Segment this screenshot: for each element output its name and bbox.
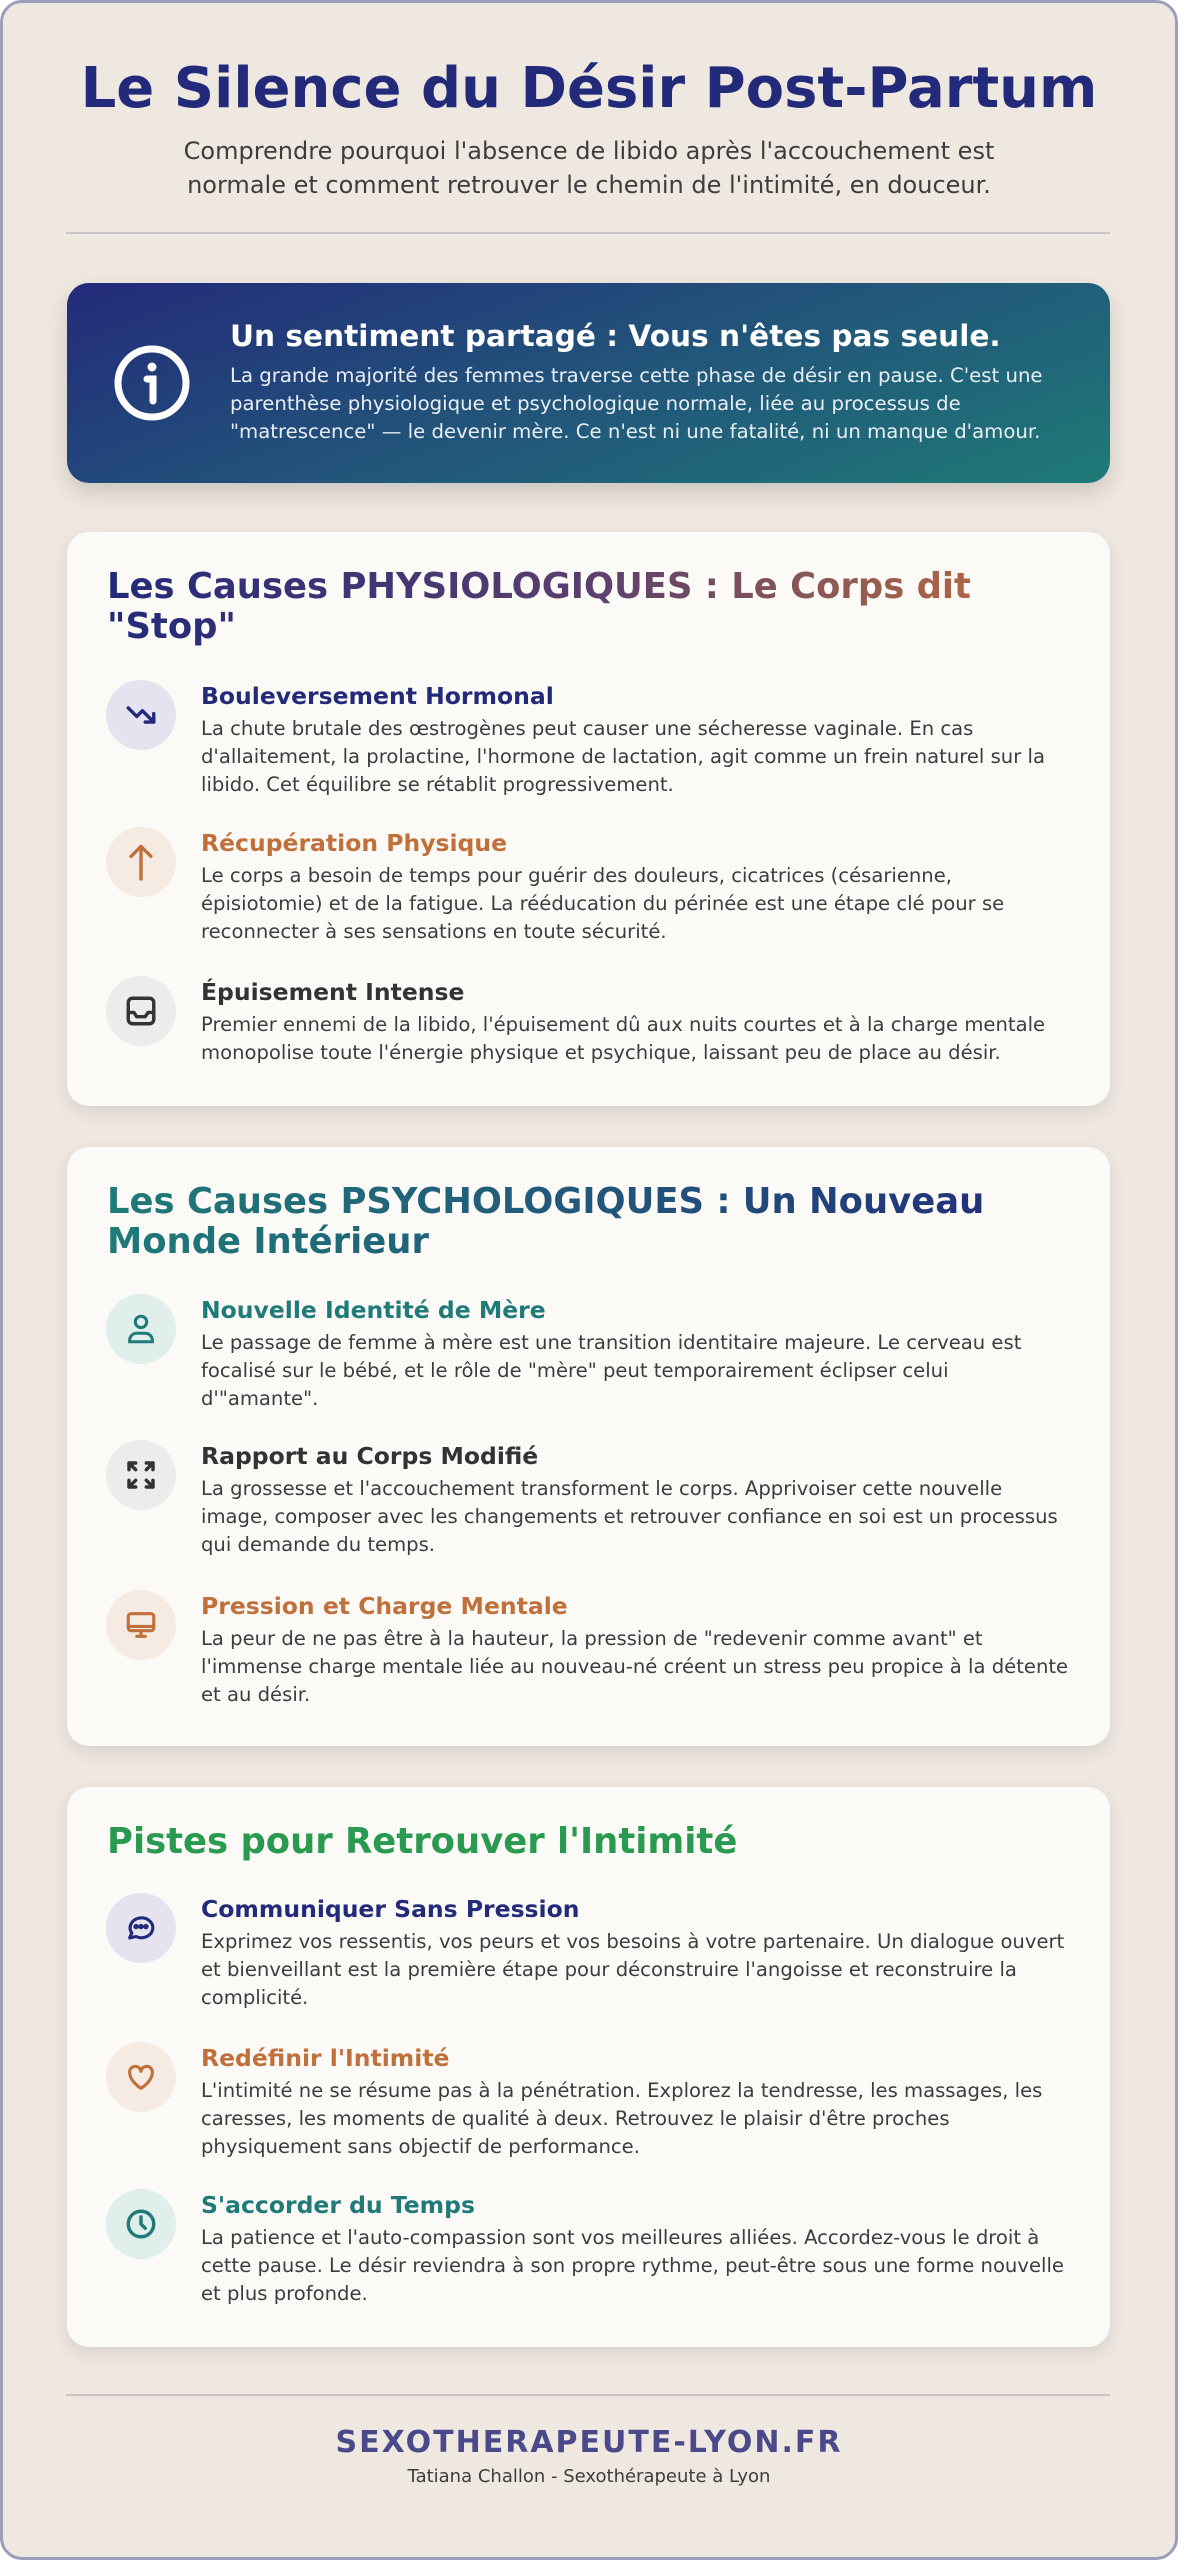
- item: redefine: Redéfinir l'Intimité: [201, 2044, 450, 2072]
- banner: not alone: [67, 283, 1110, 483]
- item: pressure: La peur de ne pas être à la hauteur, la pression de "redevenir comme avant" et l'immense charge mentale liée au nouveau-né créent un stress peu propice à la détente et au désir.: [201, 1627, 1068, 1706]
- icon: heart: [106, 2042, 176, 2112]
- footer: site: SEXOTHERAPEUTE-LYON.FR: [336, 2425, 842, 2460]
- item: communicate: Communiquer Sans Pression: [201, 1895, 579, 1923]
- item: exhaustion: Premier ennemi de la libido, l'épuisement dû aux nuits courtes et à la charge mentale monopolise toute l'énergie physique et psychique, laissant peu de place au désir.: [201, 1013, 1045, 1064]
- item: time: [106, 2189, 1064, 2305]
- icon: trend down: [106, 680, 176, 750]
- item: exhaustion: Épuisement Intense: [201, 978, 464, 1006]
- item: body: La grossesse et l'accouchement transforment le corps. Apprivoiser cette nouvelle image, composer avec les changements et retrouver confiance en soi est un processus qui demande du temps.: [201, 1477, 1058, 1556]
- item: pressure: [106, 1590, 1068, 1706]
- icon: monitor: [106, 1590, 176, 1660]
- icon: clock: [106, 2189, 176, 2259]
- icon: arrow up: [106, 827, 176, 897]
- icon: info: [114, 346, 190, 420]
- panel: physiological causes: [67, 532, 1110, 1106]
- item: time: La patience et l'auto-compassion sont vos meilleures alliées. Accordez-vous le droit à cette pause. Le désir reviendra à son propre rythme, peut-être sous une forme nouvelle et plus profonde.: [201, 2226, 1064, 2305]
- icon: inbox: [106, 976, 176, 1046]
- item: body: Rapport au Corps Modifié: [201, 1442, 538, 1470]
- item: hormonal: [106, 680, 1045, 796]
- item: redefine: [106, 2042, 1042, 2158]
- item: identity: [106, 1294, 1021, 1410]
- footer: author: Tatiana Challon - Sexothérapeute à Lyon: [408, 2466, 770, 2487]
- item: physical recovery: Le corps a besoin de temps pour guérir des douleurs, cicatrices (césarienne, épisiotomie) et de la fatigue. La rééducation du périnée est une étape clé pour se reconnecter à ses sensations en toute sécurité.: [201, 864, 1004, 943]
- item: hormonal: La chute brutale des œstrogènes peut causer une sécheresse vaginale. En cas d'allaitement, la prolactine, l'hormone de lactation, agit comme un frein naturel sur la libido. Cet équilibre se rétablit progressivement.: [201, 717, 1045, 796]
- item: communicate: [106, 1893, 1064, 2009]
- item: redefine: L'intimité ne se résume pas à la pénétration. Explorez la tendresse, les massages, les caresses, les moments de qualité à deux. Retrouvez le plaisir d'être proches physiquement sans objectif de performance.: [201, 2079, 1042, 2158]
- item: communicate: Exprimez vos ressentis, vos peurs et vos besoins à votre partenaire. Un dialogue ouvert et bienveillant est la première étape pour déconstruire l'angoisse et reconstruire la complicité.: [201, 1930, 1064, 2009]
- item: physical recovery: [106, 827, 1004, 943]
- panel: psychological causes: [67, 1147, 1110, 1746]
- icon: chat: [106, 1893, 176, 1963]
- item: identity: Nouvelle Identité de Mère: [201, 1296, 546, 1324]
- heading: Les Causes PSYCHOLOGIQUES : Un Nouveau Monde Intérieur: [107, 1181, 984, 1262]
- item: exhaustion: [106, 976, 1045, 1064]
- item: pressure: Pression et Charge Mentale: [201, 1592, 568, 1620]
- item: identity: Le passage de femme à mère est une transition identitaire majeure. Le cerveau est focalisé sur le bébé, et le rôle de "mère" peut temporairement éclipser celui d'"amante".: [201, 1331, 1021, 1410]
- item: hormonal: Bouleversement Hormonal: [201, 682, 554, 710]
- icon: expand: [106, 1440, 176, 1510]
- banner text: La grande majorité des femmes traverse cette phase de désir en pause. C'est une parenthèse physiologique et psychologique normale, liée au processus de "matrescence" — le devenir mère. Ce n'est ni une fatalité, ni un manque d'amour.: [230, 364, 1043, 443]
- heading: Pistes pour Retrouver l'Intimité: [107, 1821, 737, 1862]
- subtitle: Comprendre pourquoi l'absence de libido après l'accouchement est normale et comment retrouver le chemin de l'intimité, en douceur.: [184, 137, 994, 199]
- heading: Les Causes PHYSIOLOGIQUES : Le Corps dit "Stop": [107, 566, 971, 647]
- item: time: S'accorder du Temps: [201, 2191, 475, 2219]
- title: Le Silence du Désir Post-Partum: [81, 56, 1097, 121]
- panel: paths to intimacy: [67, 1787, 1110, 2347]
- banner heading: Un sentiment partagé : Vous n'êtes pas seule.: [230, 319, 1001, 353]
- item: physical recovery: Récupération Physique: [201, 829, 507, 857]
- icon: user: [106, 1294, 176, 1364]
- item: body: [106, 1440, 1058, 1556]
